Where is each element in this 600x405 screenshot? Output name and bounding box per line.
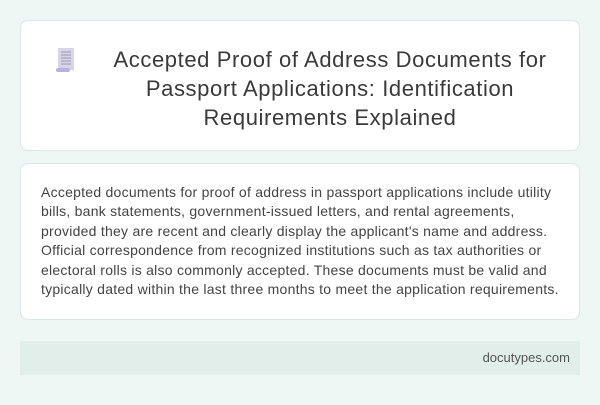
- icon: document: [56, 48, 74, 72]
- footer text: docutypes.com: [483, 350, 570, 365]
- title text: Accepted Proof of Address Documents for Passport Applications: Identification Requirements Explained: [113, 47, 547, 130]
- body text: Accepted documents for proof of address in passport applications include utility bills, bank statements, government-issued letters, and rental agreements, provided they are recent and clearly display the applicant's name and address. Official correspondence from recognized institutions such as tax authorities or electoral rolls is also commonly accepted. These documents must be valid and typically dated within the last three months to meet the application requirements.: [41, 184, 559, 297]
- panel: description: [20, 163, 580, 320]
- footer: [20, 341, 580, 375]
- panel: title: [20, 20, 580, 151]
